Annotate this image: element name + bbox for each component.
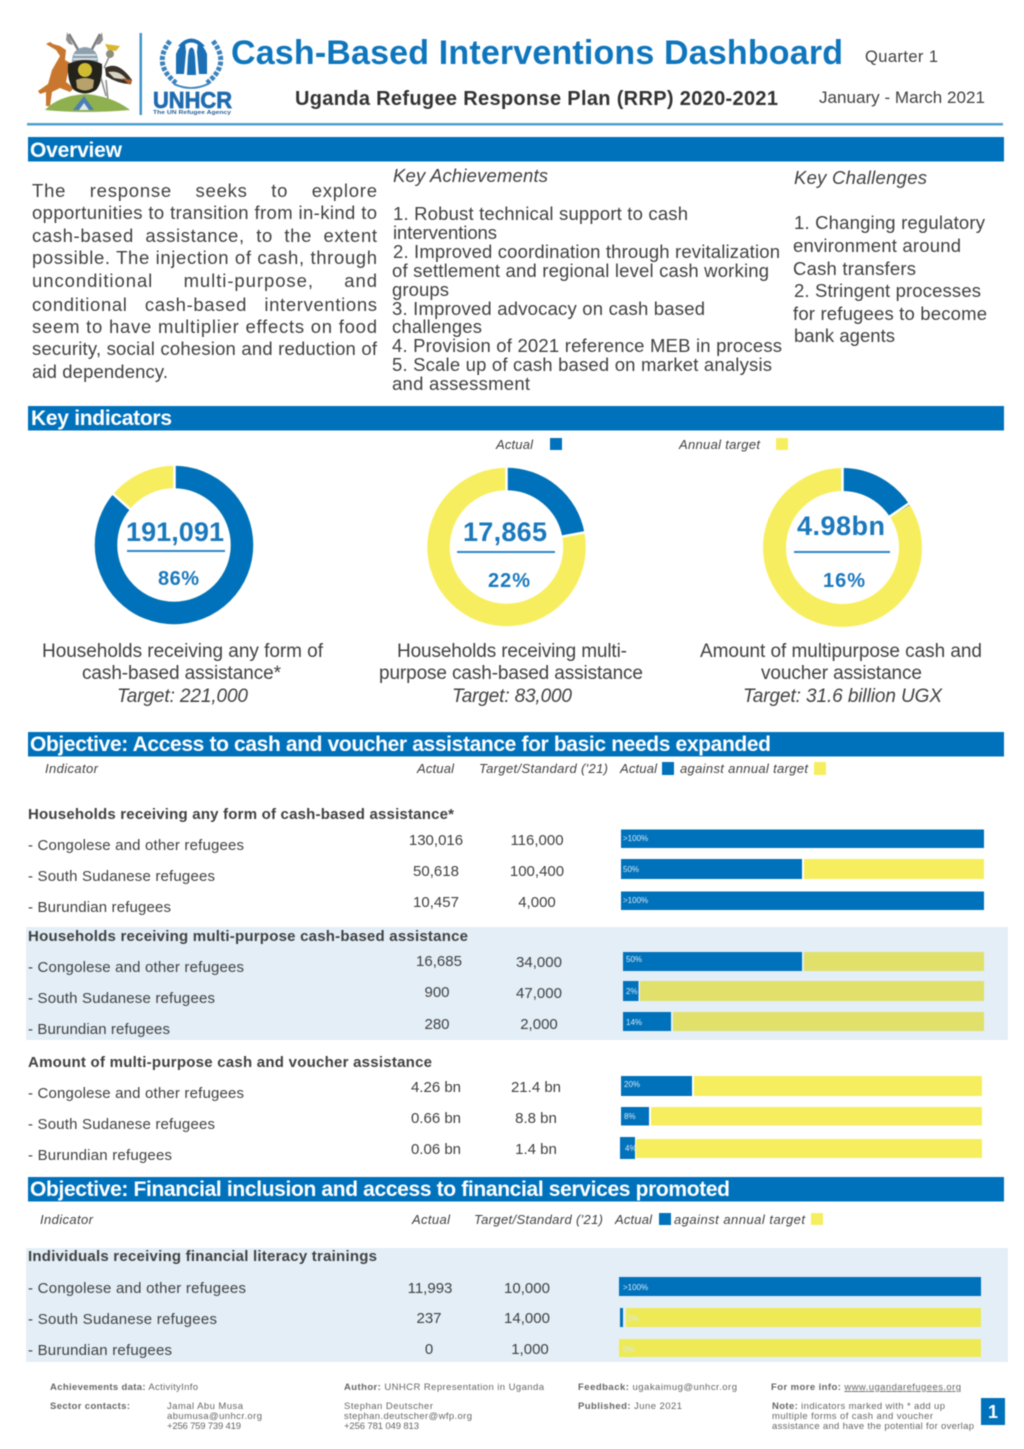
text block: key challenges: 2. Stringent processes	[794, 280, 981, 301]
table header: objective financial inclusion: Target/Standard ('21)	[474, 1212, 603, 1227]
footer: credits and contacts: Published: June 2021	[578, 1401, 682, 1412]
section heading: objective financial inclusion	[28, 1177, 1004, 1202]
table group: households any form: - Burundian refugees	[28, 899, 171, 916]
caption: households multi-purpose	[379, 641, 643, 707]
table header: objective basic needs: against annual target	[680, 761, 809, 776]
footer: credits and contacts	[50, 1382, 974, 1432]
caption: households multi-purpose: purpose cash-based assistance	[379, 663, 643, 684]
table group: financial literacy trainings: - Burundian refugees	[28, 1342, 172, 1359]
table group: amount of multi-purpose cash: - Burundian refugees	[28, 1147, 172, 1164]
text block: overview paragraph: security, social cohesion and reduction of	[32, 338, 378, 359]
table group: amount of multi-purpose cash: - South Sudanese refugees	[28, 1116, 215, 1133]
table group: financial literacy trainings: 0%	[623, 1345, 635, 1354]
table group: households multi-purpose: Households receiving multi-purpose cash-based assistance	[28, 928, 468, 945]
donut chart: households any form: 86%	[158, 568, 199, 590]
page number	[981, 1398, 1005, 1425]
footer: credits and contacts: Achievements data: ActivityInfo	[50, 1382, 198, 1393]
legend: actual and annual target: Annual target	[678, 437, 761, 452]
text block: overview paragraph: conditional cash-based interventions	[32, 294, 377, 315]
date range: January - March 2021	[819, 88, 985, 107]
table group: amount of multi-purpose cash: 8.8 bn	[515, 1110, 557, 1127]
text block: overview paragraph: cash-based assistance, to the extent	[32, 225, 377, 246]
text block: key achievements: groups	[392, 279, 449, 300]
table group: financial literacy trainings: 1,000	[511, 1341, 549, 1358]
donut chart: households multi-purpose: 17,865	[463, 517, 547, 547]
table header: objective basic needs: Actual	[416, 761, 455, 776]
section heading: objective basic needs: Objective: Access to cash and voucher assistance for basic needs expanded	[30, 733, 771, 756]
table group: households any form: - South Sudanese refugees	[28, 868, 215, 885]
donut chart: households multi-purpose: 22%	[488, 570, 530, 592]
section heading: key indicators	[28, 406, 1004, 430]
text block: key achievements: Key Achievements	[393, 165, 548, 186]
table group: households multi-purpose: 14%	[626, 1018, 642, 1027]
caption: households multi-purpose: Target: 83,000	[452, 686, 572, 707]
section heading: key indicators: Key indicators	[31, 407, 172, 430]
section heading: objective financial inclusion: Objective: Financial inclusion and access to financial services promoted	[30, 1178, 730, 1201]
text block: key achievements	[392, 165, 782, 394]
text block: key challenges: for refugees to become	[793, 303, 987, 324]
donut chart: amount of multipurpose cash: 4.98bn	[797, 511, 885, 541]
text block: overview paragraph: opportunities to transition from in-kind to	[32, 202, 377, 223]
text block: key achievements: 2. Improved coordination through revitalization	[393, 241, 780, 262]
table group: amount of multi-purpose cash: 1.4 bn	[515, 1141, 557, 1158]
donut chart: amount of multipurpose cash	[774, 466, 911, 616]
table header: objective basic needs: Actual	[619, 761, 658, 776]
table group: amount of multi-purpose cash: 4%	[625, 1144, 637, 1153]
table group: households any form: 10,457	[413, 894, 459, 911]
table group: households any form: 116,000	[510, 832, 564, 849]
table group: households any form: 130,016	[409, 832, 463, 849]
table group: financial literacy trainings: 0	[425, 1341, 433, 1358]
footer: credits and contacts: For more info: www.ugandarefugees.org	[771, 1382, 961, 1393]
caption: households multi-purpose: Households receiving multi-	[397, 641, 627, 662]
text block: key achievements: interventions	[393, 222, 497, 243]
donut chart: households any form	[106, 464, 242, 613]
divider between logos	[140, 33, 142, 115]
text block: key achievements: 5. Scale up of cash based on market analysis	[392, 354, 772, 375]
table group: financial literacy trainings: 14,000	[504, 1310, 550, 1327]
caption: amount of multipurpose cash: Amount of multipurpose cash and	[700, 641, 982, 662]
table group: financial literacy trainings: 11,993	[408, 1280, 452, 1297]
footer: credits and contacts: Sector contacts:	[50, 1401, 130, 1412]
table group: households any form: 50%	[623, 865, 639, 874]
text block: key challenges: Cash transfers	[793, 258, 916, 279]
table group: households any form: 50,618	[413, 863, 459, 880]
footer: credits and contacts: +256 759 739 419	[167, 1421, 241, 1432]
footer: credits and contacts: +256 781 049 813	[344, 1421, 419, 1432]
table group: financial literacy trainings: - Congolese and other refugees	[28, 1280, 246, 1297]
caption: households any form: Households receiving any form of	[42, 641, 324, 662]
table group: amount of multi-purpose cash: 8%	[624, 1112, 636, 1121]
caption: households any form: Target: 221,000	[117, 686, 248, 707]
table group: households multi-purpose: 34,000	[516, 954, 562, 971]
text block: overview paragraph: The response seeks to explore	[32, 180, 377, 201]
table header: objective financial inclusion: against annual target	[674, 1212, 806, 1227]
icon: UNHCR logo: UNHCR	[153, 87, 232, 113]
table group: amount of multi-purpose cash: - Congolese and other refugees	[28, 1085, 244, 1102]
table group: financial literacy trainings: Individuals receiving financial literacy trainings	[28, 1248, 377, 1265]
table group: households multi-purpose: - Congolese and other refugees	[28, 959, 244, 976]
icon: UNHCR logo	[153, 38, 232, 116]
table group: households any form	[28, 806, 984, 916]
text block: key challenges: environment around	[793, 235, 961, 256]
footer: credits and contacts: Feedback: ugakaimug@unhcr.org	[578, 1382, 737, 1393]
table group: households multi-purpose: 50%	[626, 955, 642, 964]
text block: key challenges: Key Challenges	[794, 167, 927, 188]
text block: key challenges: 1. Changing regulatory	[794, 212, 986, 233]
table group: households multi-purpose: - South Sudanese refugees	[28, 990, 215, 1007]
page number: 1	[988, 1402, 998, 1422]
panel: multi-purpose households background	[26, 927, 1008, 1040]
table group: households multi-purpose: 2%	[626, 987, 638, 996]
table header: objective basic needs: Target/Standard ('21)	[479, 761, 608, 776]
caption: amount of multipurpose cash: Target: 31.6 billion UGX	[743, 686, 943, 707]
table group: households any form: Households receiving any form of cash-based assistance*	[28, 806, 454, 823]
footer: credits and contacts: stephan.deutscher@wfp.org	[344, 1411, 472, 1422]
caption: amount of multipurpose cash	[700, 641, 982, 707]
table group: households multi-purpose: 47,000	[516, 985, 562, 1002]
donut chart: amount of multipurpose cash: 16%	[823, 570, 865, 592]
text block: key achievements: challenges	[392, 316, 482, 337]
footer: credits and contacts: Jamal Abu Musa	[167, 1401, 244, 1412]
footer: credits and contacts: Note: indicators marked with * add up	[772, 1401, 945, 1412]
caption: households any form	[42, 641, 324, 707]
title: Cash-Based Interventions Dashboard	[231, 34, 843, 72]
table header: objective financial inclusion: Actual	[411, 1212, 451, 1227]
table group: amount of multi-purpose cash: 20%	[624, 1080, 640, 1089]
table header: objective basic needs: Indicator	[45, 761, 99, 776]
table group: households multi-purpose: 16,685	[416, 953, 462, 970]
section heading: overview	[28, 137, 1004, 162]
legend: actual and annual target: Actual	[495, 437, 534, 452]
table group: amount of multi-purpose cash: 0.06 bn	[411, 1141, 461, 1158]
text block: overview paragraph: possible. The injection of cash, through	[32, 247, 377, 268]
table group: amount of multi-purpose cash: 4.26 bn	[411, 1079, 461, 1096]
icon: UNHCR logo: The UN Refugee Agency	[153, 110, 232, 116]
donut chart: households any form: 191,091	[126, 517, 224, 547]
table group: households multi-purpose: 2,000	[520, 1016, 558, 1033]
table group: financial literacy trainings	[28, 1248, 981, 1359]
table group: households multi-purpose: 280	[424, 1016, 450, 1033]
table group: financial literacy trainings: 237	[416, 1310, 442, 1327]
table group: amount of multi-purpose cash	[28, 1054, 982, 1164]
table header: objective financial inclusion	[40, 1212, 823, 1227]
table group: amount of multi-purpose cash: 21.4 bn	[511, 1079, 561, 1096]
text block: key challenges: bank agents	[794, 325, 895, 346]
caption: households any form: cash-based assistance*	[82, 663, 282, 684]
text block: key achievements: 3. Improved advocacy on cash based	[392, 298, 705, 319]
text block: key challenges	[793, 167, 987, 346]
section heading: overview: Overview	[30, 139, 123, 162]
quarter label: Quarter 1	[865, 48, 938, 66]
footer: credits and contacts: abumusa@unhcr.org	[167, 1411, 262, 1422]
panel: financial literacy background	[26, 1248, 1008, 1362]
table group: households any form: 4,000	[518, 894, 556, 911]
table group: financial literacy trainings: 10,000	[504, 1280, 550, 1297]
table header: objective financial inclusion: Indicator	[40, 1212, 94, 1227]
text block: key achievements: 4. Provision of 2021 reference MEB in process	[392, 335, 782, 356]
table group: households multi-purpose: 900	[424, 984, 450, 1001]
table group: amount of multi-purpose cash: Amount of multi-purpose cash and voucher assistance	[28, 1054, 432, 1071]
text block: overview paragraph: unconditional multi-purpose, and	[32, 270, 377, 291]
table group: amount of multi-purpose cash: 0.66 bn	[411, 1110, 461, 1127]
text block: overview paragraph: aid dependency.	[32, 361, 168, 382]
table group: financial literacy trainings: >100%	[623, 1283, 648, 1292]
table group: financial literacy trainings: 2%	[627, 1314, 639, 1323]
text block: key achievements: and assessment	[392, 373, 530, 394]
text block: overview paragraph	[32, 180, 378, 382]
subtitle: Uganda Refugee Response Plan (RRP) 2020-2021	[295, 88, 778, 110]
legend: actual and annual target	[495, 437, 788, 452]
donut chart: households multi-purpose	[438, 466, 588, 615]
table group: households any form: - Congolese and other refugees	[28, 837, 244, 854]
table group: households multi-purpose: - Burundian refugees	[28, 1021, 170, 1038]
footer: credits and contacts: Stephan Deutscher	[344, 1401, 433, 1412]
table group: households any form: >100%	[623, 834, 648, 843]
table group: households any form: 100,400	[510, 863, 564, 880]
footer: credits and contacts: Author: UNHCR Representation in Uganda	[344, 1382, 545, 1393]
footer: credits and contacts: multiple forms of cash and voucher	[772, 1411, 933, 1422]
caption: amount of multipurpose cash: voucher assistance	[761, 663, 922, 684]
text block: key achievements: 1. Robust technical support to cash	[393, 203, 688, 224]
text block: key achievements: of settlement and regional level cash working	[392, 260, 769, 281]
table group: households any form: >100%	[623, 896, 648, 905]
footer: credits and contacts: assistance and have the potential for overlap	[772, 1421, 974, 1432]
table group: households multi-purpose	[28, 928, 984, 1038]
table group: financial literacy trainings: - South Sudanese refugees	[28, 1311, 217, 1328]
table header: objective basic needs	[45, 761, 826, 776]
table header: objective financial inclusion: Actual	[614, 1212, 653, 1227]
text block: overview paragraph: seem to have multiplier effects on food	[32, 316, 377, 337]
icon: Uganda coat of arms	[38, 32, 132, 112]
